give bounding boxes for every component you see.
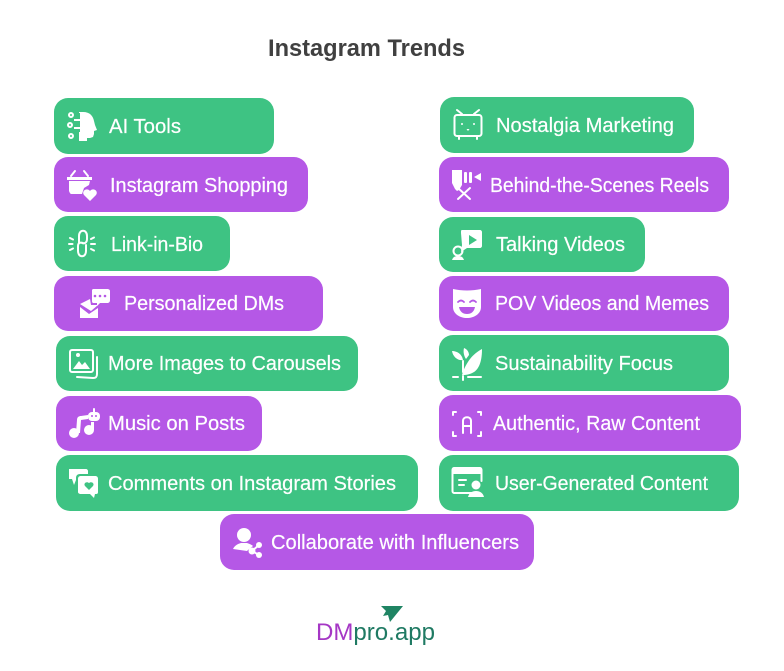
item: Sustainability Focus xyxy=(439,335,729,391)
label: Behind-the-Scenes Reels: Behind-the-Scenes Reels xyxy=(490,175,709,197)
item: Link-in-Bio xyxy=(54,216,230,271)
item: Music on Posts xyxy=(56,396,262,451)
item: Talking Videos xyxy=(439,217,645,272)
icon: chain link xyxy=(69,231,95,256)
item: POV Videos and Memes xyxy=(439,276,729,331)
item: Collaborate with Influencers xyxy=(220,514,534,570)
label: More Images to Carousels: More Images to Carousels xyxy=(108,353,341,375)
icon: speech bubbles with heart xyxy=(69,469,98,498)
icon: stacked images xyxy=(70,350,97,378)
item: Instagram Shopping xyxy=(54,157,308,212)
label: Authentic, Raw Content: Authentic, Raw Content xyxy=(493,413,700,435)
icon: person with share nodes xyxy=(233,528,262,558)
label: POV Videos and Memes: POV Videos and Memes xyxy=(495,293,709,315)
icon: letter A in a scan frame xyxy=(453,412,481,436)
item: User-Generated Content xyxy=(439,455,739,511)
logo wordmark: DMpro.app xyxy=(316,619,435,646)
icon: sprout and leaf xyxy=(452,348,482,380)
label: AI Tools: AI Tools xyxy=(109,116,181,138)
icon: browser window with user xyxy=(452,468,484,497)
label: Music on Posts: Music on Posts xyxy=(108,413,245,435)
label: User-Generated Content: User-Generated Content xyxy=(495,473,708,495)
item: Comments on Instagram Stories xyxy=(56,455,418,511)
label: Sustainability Focus: Sustainability Focus xyxy=(495,353,673,375)
icon: logo paper plane xyxy=(381,606,403,622)
panel: right column of trends xyxy=(439,97,741,511)
item: More Images to Carousels xyxy=(56,336,358,391)
label: Talking Videos: Talking Videos xyxy=(496,234,625,256)
logo: DMpro.app xyxy=(316,606,435,646)
icon: theatre mask xyxy=(453,289,481,318)
icon: retro television xyxy=(454,110,482,139)
label: Collaborate with Influencers: Collaborate with Influencers xyxy=(271,532,519,554)
label: Personalized DMs: Personalized DMs xyxy=(124,293,284,315)
label: Instagram Shopping: Instagram Shopping xyxy=(110,175,288,197)
panel: left column of trends xyxy=(54,98,418,511)
icon: envelope with chat bubble xyxy=(80,289,110,318)
label: Comments on Instagram Stories: Comments on Instagram Stories xyxy=(108,473,396,495)
item: AI Tools xyxy=(54,98,274,154)
title: Instagram Trends xyxy=(268,35,465,62)
icon: AI head xyxy=(68,112,97,141)
item: Authentic, Raw Content xyxy=(439,395,741,451)
label: Nostalgia Marketing: Nostalgia Marketing xyxy=(496,115,674,137)
item: Personalized DMs xyxy=(54,276,323,331)
label: Link-in-Bio: Link-in-Bio xyxy=(111,234,203,256)
icon: film camera on tripod xyxy=(452,170,481,199)
icon: shopping basket with heart xyxy=(67,171,97,201)
item: Behind-the-Scenes Reels xyxy=(439,157,729,212)
icon: speaker with video bubble xyxy=(452,230,482,260)
icon: music notes with robot xyxy=(69,409,100,438)
item: Nostalgia Marketing xyxy=(440,97,694,153)
